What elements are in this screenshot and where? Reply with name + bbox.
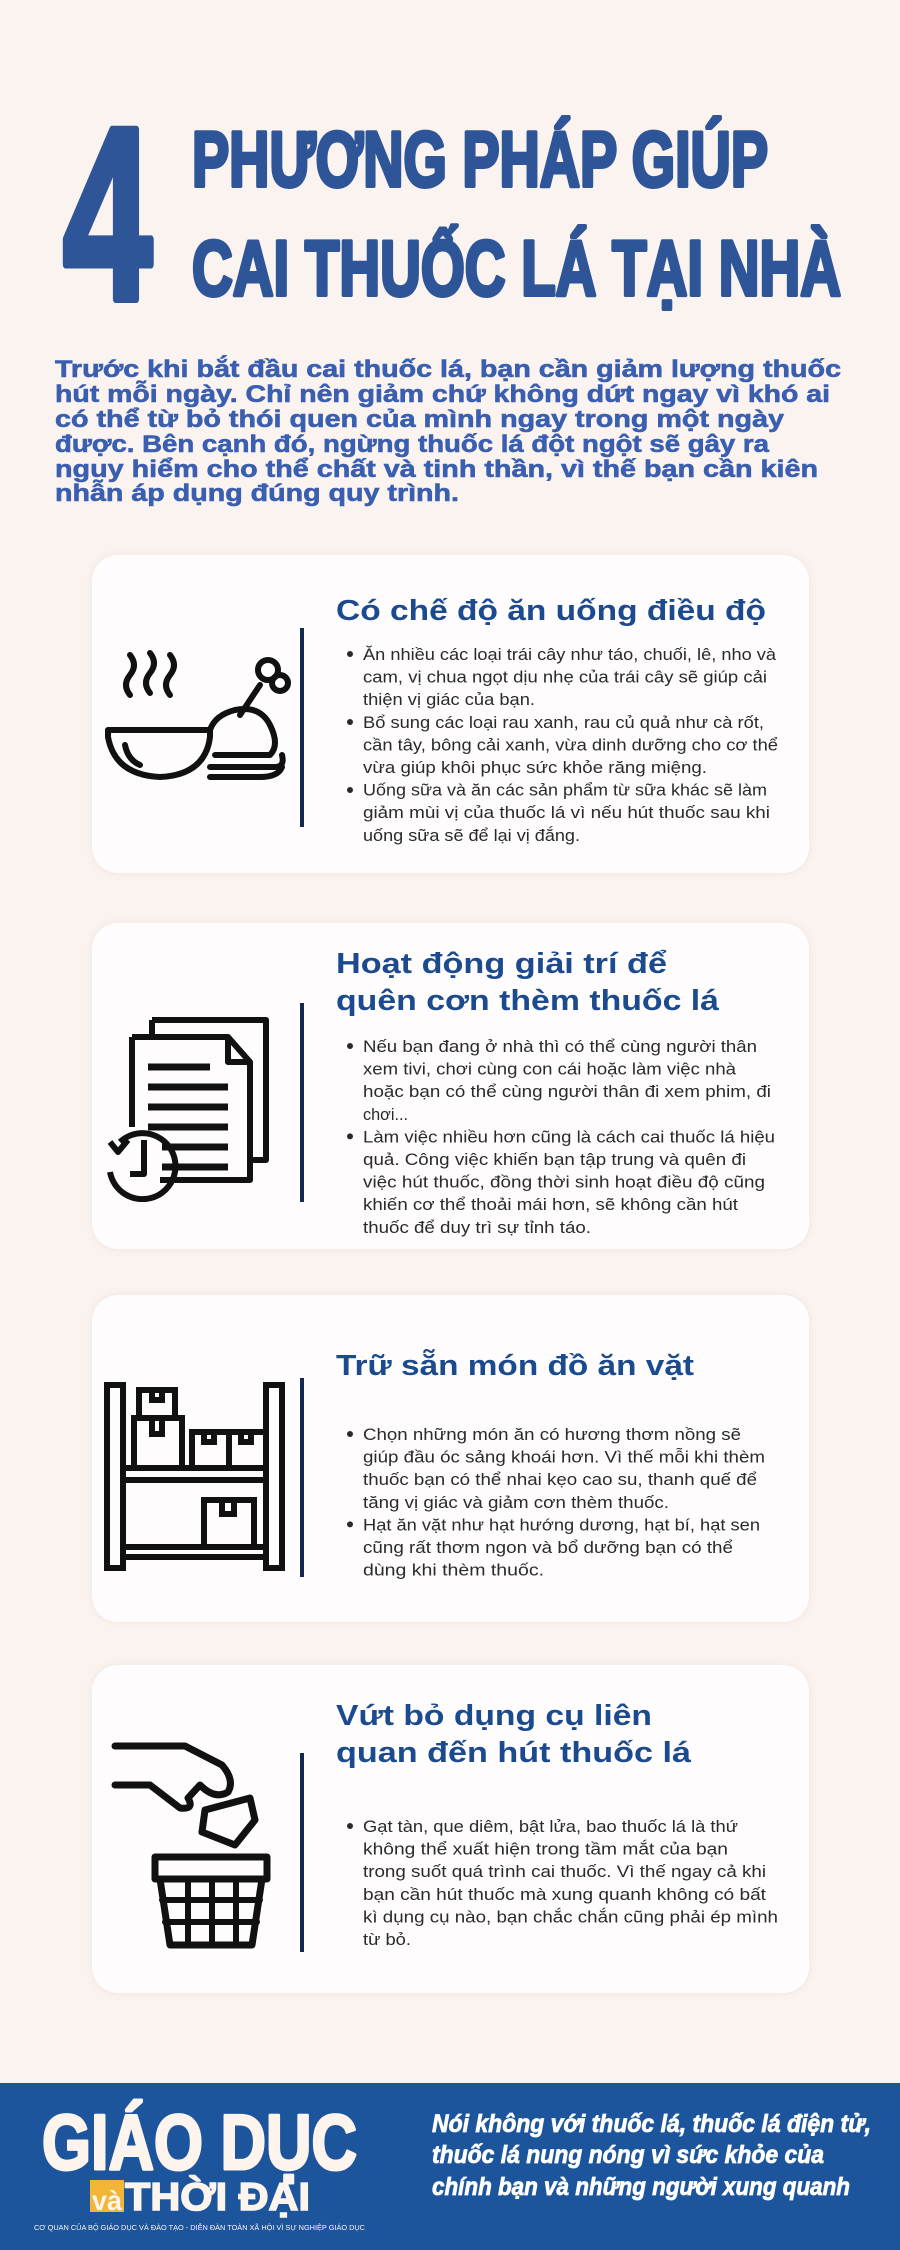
bullets: snacks: dùng khi thèm thuốc. <box>363 1561 544 1580</box>
intro text: được. Bên cạnh đó, ngừng thuốc lá đột ngột sẽ gây ra <box>55 431 770 458</box>
slogan: thuốc lá nung nóng vì sức khỏe của <box>432 2141 824 2169</box>
heading: entertainment: quên cơn thèm thuốc lá <box>336 985 720 1017</box>
bullets: snacks: tăng vị giác và giảm cơn thèm thuốc. <box>363 1493 669 1512</box>
intro text: nhẫn áp dụng đúng quy trình. <box>55 479 459 507</box>
bullets: entertainment: quả. Công việc khiến bạn tập trung và quên đi <box>363 1150 746 1169</box>
logo: CƠ QUAN CỦA BỘ GIÁO DỤC VÀ ĐÀO TẠO - DIỄN ĐÀN TOÀN XÃ HỘI VÌ SỰ NGHIỆP GIÁO DỤC <box>34 2223 365 2232</box>
bullets: entertainment <box>347 1037 775 1237</box>
heading: diet: Có chế độ ăn uống điều độ <box>336 595 766 627</box>
bullets: diet: thiện vị giác của bạn. <box>363 690 535 709</box>
intro text <box>54 355 841 507</box>
intro text: có thể từ bỏ thói quen của mình ngay trong một ngày <box>55 406 785 433</box>
bullets: entertainment: Làm việc nhiều hơn cũng là cách cai thuốc lá hiệu <box>363 1127 775 1146</box>
bullets: diet <box>347 645 778 845</box>
logo <box>34 2098 365 2232</box>
bullets: diet: uống sữa sẽ để lại vị đắng. <box>363 826 580 845</box>
bullets: entertainment: thuốc để duy trì sự tỉnh táo. <box>363 1218 591 1237</box>
heading: snacks: Trữ sẵn món đồ ăn vặt <box>336 1348 694 1382</box>
bullets: diet: Bổ sung các loại rau xanh, rau củ quả như cà rốt, <box>363 713 764 732</box>
panel: entertainment <box>92 923 809 1249</box>
bullets: snacks <box>347 1425 765 1580</box>
heading: entertainment <box>336 948 720 1017</box>
bullets: entertainment: hoặc bạn có thể cùng người thân đi xem phim, đi <box>363 1082 771 1101</box>
bullets: entertainment: xem tivi, chơi cùng con cái hoặc làm việc nhà <box>363 1060 737 1079</box>
bullets: entertainment: khiến cơ thể thoải mái hơn, sẽ không cần hút <box>363 1195 738 1214</box>
heading: discard tools: Vứt bỏ dụng cụ liên <box>336 1700 652 1732</box>
logo: THỜI ĐẠI <box>125 2175 310 2219</box>
panel: diet <box>92 555 809 873</box>
slogan: chính bạn và những người xung quanh <box>432 2173 850 2201</box>
bullets: diet: Ăn nhiều các loại trái cây như táo, chuối, lê, nho và <box>363 645 777 664</box>
bullets: diet: cần tây, bông cải xanh, vừa dinh dưỡng cho cơ thể <box>363 735 778 754</box>
icon: shelf with boxes <box>104 1382 285 1571</box>
bullets: discard tools: từ bỏ. <box>363 1930 411 1949</box>
logo: và <box>92 2185 122 2216</box>
bullets: snacks: cũng rất thơm ngon và bổ dưỡng bạn có thể <box>363 1538 733 1557</box>
intro text: Trước khi bắt đầu cai thuốc lá, bạn cần giảm lượng thuốc <box>55 355 841 383</box>
heading: entertainment: Hoạt động giải trí để <box>336 948 667 980</box>
bullets: discard tools <box>347 1817 778 1949</box>
bullets: entertainment: việc hút thuốc, đồng thời sinh hoạt điều độ cũng <box>363 1173 765 1192</box>
intro text: hút mỗi ngày. Chỉ nên giảm chứ không dứt ngay vì khó ai <box>55 380 830 408</box>
panel: snacks <box>92 1295 809 1622</box>
icon: food <box>105 650 291 780</box>
slogan <box>432 2110 871 2201</box>
bullets: entertainment: Nếu bạn đang ở nhà thì có thể cùng người thân <box>363 1037 757 1056</box>
bullets: discard tools: Gạt tàn, que diêm, bật lửa, bao thuốc lá là thứ <box>363 1817 738 1836</box>
heading: discard tools <box>336 1700 692 1769</box>
bullets: entertainment: chơi... <box>363 1105 408 1124</box>
bullets: discard tools: không thể xuất hiện trong tầm mắt của bạn <box>363 1840 728 1859</box>
bullets: diet: Uống sữa và ăn các sản phẩm từ sữa khác sẽ làm <box>363 781 767 800</box>
footer <box>0 2083 900 2250</box>
bullets: snacks: thuốc bạn có thể nhai kẹo cao su, thanh quế để <box>363 1470 757 1489</box>
heading: discard tools: quan đến hút thuốc lá <box>336 1737 692 1769</box>
bullets: discard tools: trong suốt quá trình cai thuốc. Vì thế ngay cả khi <box>363 1862 766 1881</box>
bullets: diet: giảm mùi vị của thuốc lá vì nếu hút thuốc sau khi <box>363 803 770 822</box>
bullets: discard tools: bạn cần hút thuốc mà xung quanh không có bất <box>363 1885 766 1904</box>
bullets: snacks: giúp đầu óc sảng khoái hơn. Vì thế mỗi khi thèm <box>363 1448 765 1467</box>
icon: documents with clock <box>107 1017 269 1202</box>
bullets: snacks: Hạt ăn vặt như hạt hướng dương, hạt bí, hạt sen <box>363 1515 760 1534</box>
bullets: diet: vừa giúp khôi phục sức khỏe răng miệng. <box>363 758 707 777</box>
intro text: nguy hiểm cho thể chất và tinh thần, vì thế bạn cần kiên <box>55 456 818 483</box>
slogan: Nói không với thuốc lá, thuốc lá điện tử, <box>432 2110 871 2138</box>
bullets: diet: cam, vị chua ngọt dịu nhẹ của trái cây sẽ giúp cải <box>363 668 767 687</box>
bullets: discard tools: kì dụng cụ nào, bạn chắc chắn cũng phải ép mình <box>363 1907 778 1926</box>
title <box>62 77 841 320</box>
panel: discard tools <box>92 1665 809 1993</box>
icon: hand dropping into trash <box>112 1742 270 1948</box>
bullets: snacks: Chọn những món ăn có hương thơm nồng sẽ <box>363 1425 741 1444</box>
